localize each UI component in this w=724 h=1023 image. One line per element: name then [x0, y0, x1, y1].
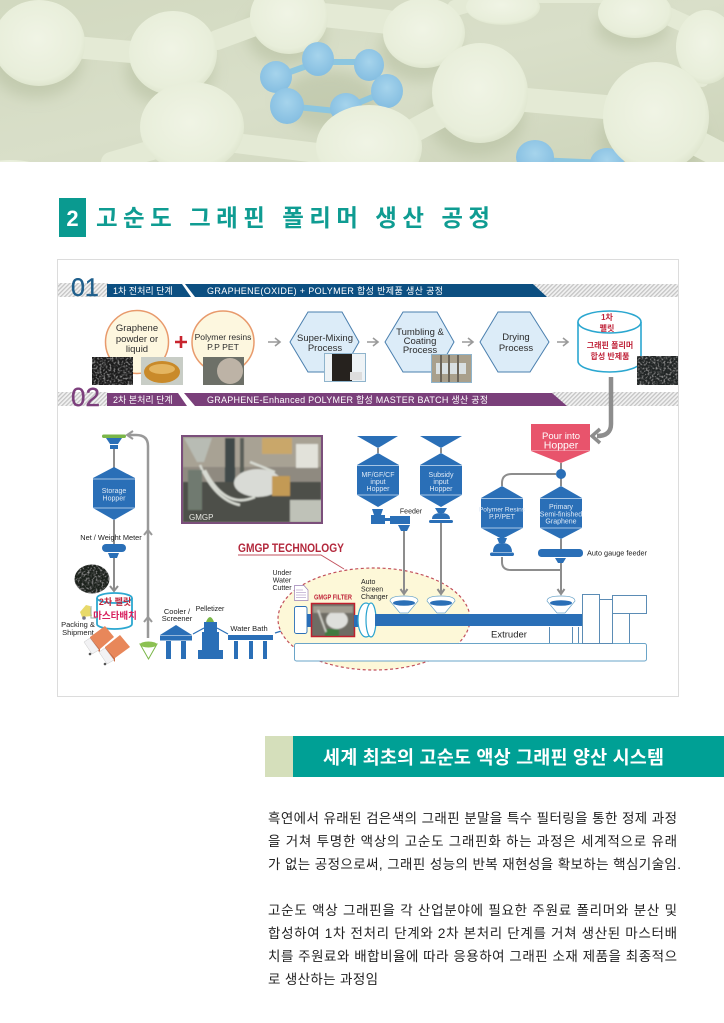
GMGP technology zone: Water [273, 578, 292, 584]
GMGP filter: GMGP FILTER [314, 594, 352, 602]
cooler and screener: Cooler / [164, 607, 191, 616]
GMGP technology zone: Under [272, 570, 292, 577]
label: packing and shipment: Shipment [62, 628, 95, 637]
arrow [268, 338, 280, 346]
pelletizer [193, 606, 228, 659]
hopper: primary semi-finished graphene: Semi-finished [540, 512, 582, 518]
process: drying [480, 312, 549, 372]
cooler and screener [160, 607, 193, 659]
hopper: primary semi-finished graphene [538, 486, 648, 594]
factory photo: GMGP [189, 513, 213, 522]
pelletizer: Pelletizer [196, 606, 225, 613]
section heading: high purity graphene polymer production process: 2 [66, 206, 79, 231]
feed funnels on extruder [390, 596, 575, 613]
arrow: return conveying line [127, 431, 152, 638]
pour into hopper: Hopper [544, 440, 579, 452]
hopper: MF/GF/CF input [357, 436, 399, 507]
cooler and screener: Screener [162, 614, 193, 623]
storage hopper: Storage [102, 488, 126, 495]
water bath: Water Bath [230, 624, 268, 633]
label: packing and shipment: Packing & [61, 620, 95, 629]
feeder [371, 508, 423, 594]
icon: delivery trucks [84, 626, 130, 665]
paragraph: liquid graphene purification: 을 거쳐 투명한 액상의 고순도 그래핀화 하는 과정은 세계적으로 유래 [268, 834, 677, 849]
stage 02 header band: 02 [71, 382, 100, 412]
GMGP technology zone: Cutter [272, 585, 292, 592]
hopper: polymer resins: Polymer Resins [479, 506, 526, 514]
hopper: primary semi-finished graphene: Auto gauge feeder [587, 548, 648, 558]
paragraph: master batch production: 치를 주원료와 배합비율에 따라 응용하여 그래핀 소재 제품을 최종적으 [268, 949, 677, 964]
process: super-mixing: Super-Mixing [297, 333, 353, 344]
paragraph: liquid graphene purification: 흑연에서 유래된 검은색의 그래핀 분말을 특수 필터링을 통한 정제 과정 [268, 811, 677, 826]
GMGP filter [312, 594, 354, 636]
stage 01 header band: GRAPHENE(OXIDE) + POLYMER 합성 반제품 생산 공정 [207, 286, 443, 296]
arrow [557, 338, 568, 346]
hopper: polymer resins: P.P/PET [489, 514, 516, 521]
hero image: molecular graphene structure [0, 0, 724, 162]
auto screen changer: Screen [361, 586, 383, 594]
second pellet photo [74, 564, 110, 594]
auto screen changer: Changer [361, 594, 389, 601]
hopper: subsidy input: Hopper [430, 486, 453, 493]
hopper: subsidy input: Subsidy [429, 472, 454, 479]
splitter node and lines [502, 463, 566, 486]
paragraph: master batch production: 고순도 액상 그래핀을 각 산업분야에 필요한 주원료 폴리머와 분산 및 [268, 903, 677, 918]
subheading banner: world first liquid graphene system: 세계 최초의 고순도 액상 그래핀 양산 시스템 [323, 747, 664, 768]
auto screen changer [354, 579, 389, 637]
stage 01 header band: 1차 전처리 단계 [113, 285, 173, 296]
storage hopper: Hopper [103, 496, 126, 502]
input circle: graphene powder or liquid: Graphene [116, 323, 158, 334]
process: super-mixing: Process [308, 343, 342, 354]
paragraph: liquid graphene purification: 가 없는 공정으로써, 그래핀 성능의 반복 재현성을 확보하는 핵심기술임. [268, 857, 681, 872]
hopper: polymer resins [479, 486, 561, 570]
paragraph: master batch production: 합성하여 1차 전처리 단계와 2차 본처리 단계를 거쳐 생산된 마스터배 [268, 926, 677, 941]
section heading: high purity graphene polymer production process: 고순도 그래핀 폴리머 생산 공정 [96, 205, 490, 231]
label: packing and shipment [61, 620, 95, 637]
cylinder: first pellet semi-finished product: 펠릿 [600, 323, 614, 333]
subheading banner: world first liquid graphene system [265, 736, 724, 777]
water bath [228, 624, 294, 659]
process: tumbling and coating: Process [403, 345, 437, 356]
paragraph: master batch production: 로 생산하는 과정임 [268, 972, 378, 987]
process: tumbling and coating: Coating [404, 336, 436, 347]
hopper: MF/GF/CF input: MF/GF/CF [361, 472, 395, 479]
pour into hopper [531, 424, 590, 463]
input circle: polymer resins: Polymer resins [195, 332, 251, 342]
GMGP technology zone [238, 543, 470, 670]
GMGP technology zone: GMGP TECHNOLOGY [238, 543, 344, 555]
arrow [367, 338, 378, 346]
arrow: pellet to hopper [592, 377, 611, 443]
cylinder: first pellet semi-finished product: 1차 [601, 312, 614, 322]
process diagram panel [58, 260, 678, 696]
cylinder: first pellet semi-finished product [578, 311, 678, 385]
net weight meter [80, 520, 142, 591]
storage hopper [93, 467, 135, 520]
process: super-mixing [290, 312, 366, 382]
cylinder: second pellet master batch: 마스타배치 [93, 610, 137, 622]
icon: forklift [80, 605, 97, 620]
hopper: MF/GF/CF input: Hopper [367, 486, 390, 493]
plus sign [175, 336, 187, 348]
hopper: MF/GF/CF input: input [370, 479, 386, 486]
cylinder: first pellet semi-finished product: 합성 반제품 [590, 351, 630, 361]
input circle: graphene powder or liquid: liquid [126, 344, 148, 355]
extruder base and machine frame: Extruder [491, 630, 527, 640]
auto screen changer: Auto [361, 579, 376, 586]
process: tumbling and coating [385, 312, 472, 382]
stage 01 header band [58, 274, 678, 302]
stage 02 header band: 2차 본처리 단계 [113, 394, 173, 405]
factory photo [182, 436, 322, 523]
cylinder: first pellet semi-finished product: 그래핀 폴리머 [587, 340, 633, 350]
cylinder: second pellet master batch [93, 593, 137, 629]
input circle: graphene powder or liquid: powder or [116, 334, 158, 345]
cylinder: second pellet master batch: 2차 펠릿 [99, 596, 131, 607]
input circle: polymer resins [192, 311, 254, 385]
hopper: subsidy input [420, 436, 462, 594]
hopper: primary semi-finished graphene: Graphene [545, 518, 577, 526]
arrow [462, 338, 473, 346]
hopper: primary semi-finished graphene: Primary [549, 504, 574, 511]
feeder: Feeder [400, 508, 423, 516]
paragraph: liquid graphene purification [268, 811, 681, 872]
process: tumbling and coating: Tumbling & [396, 327, 445, 338]
hopper: subsidy input: input [433, 479, 449, 486]
input circle: graphene powder or liquid [92, 310, 183, 385]
icon: cutter document [294, 586, 308, 600]
input circle: polymer resins: P.P PET [207, 342, 240, 352]
stage 02 header band: GRAPHENE-Enhanced POLYMER 합성 MASTER BATCH 생산 공정 [207, 395, 488, 405]
stage 01 header band: 01 [71, 274, 99, 302]
under water cutter [294, 606, 313, 634]
paragraph: master batch production [268, 903, 677, 987]
section heading: high purity graphene polymer production process [59, 198, 490, 237]
extruder base and machine frame [294, 594, 646, 661]
process: drying: Process [499, 343, 533, 354]
net weight meter: Net / Weight Meter [80, 533, 142, 542]
storage line: top funnel [102, 434, 126, 468]
pour into hopper: Pour into [542, 431, 580, 442]
green cone [140, 642, 157, 659]
process: drying: Drying [502, 332, 530, 343]
stage 02 header band [58, 382, 678, 412]
